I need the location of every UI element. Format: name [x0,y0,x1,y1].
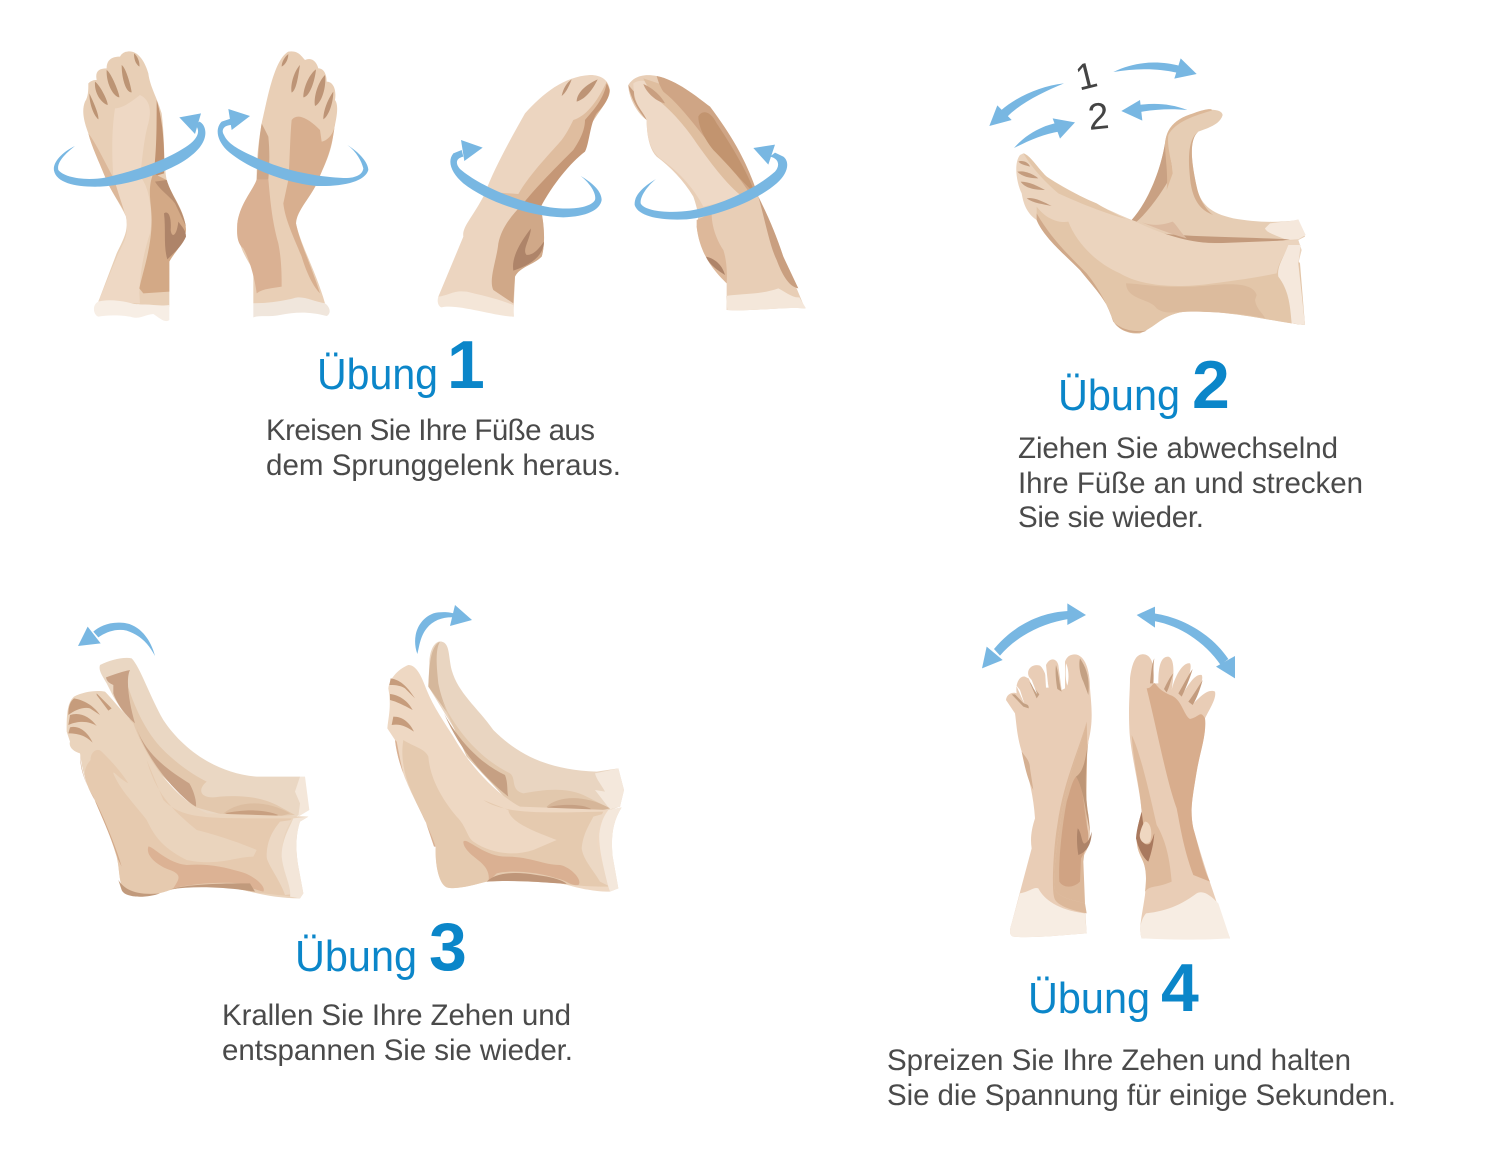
illustration: feet seen from front with circling arrows [54,51,368,321]
arrow: circling right side [635,145,787,220]
heading: Übung 3: Übung [295,932,417,981]
icon: right foot [237,51,337,317]
illustration: feet seen from side with circling arrows [438,75,806,317]
heading: Übung 1 [317,327,485,403]
icon: front foot with curled toes [67,691,308,898]
text block: exercise 2 instructions [1018,432,1363,534]
arrow: circling left side [450,140,602,217]
heading: Übung 1: 1 [447,327,485,403]
icon: right side foot [628,75,806,310]
panel: exercise 4 [887,603,1396,1112]
icon: right foot [1129,654,1230,940]
icon: front foot stretched [1016,153,1305,334]
arrow: right arrow 1 [1113,58,1197,79]
arrow: circling right [218,109,368,186]
text block: exercise 2 instructions: Ziehen Sie abwechselnd [1018,432,1338,465]
arrow: curved left [78,623,155,656]
text block: exercise 1 instructions: Kreisen Sie Ihre Füße aus [266,414,595,447]
icon: left foot [83,51,186,321]
illustration: feet flexing with arrows [989,54,1306,334]
text block: exercise 1 instructions [266,414,621,482]
text block: exercise 3 instructions: Krallen Sie Ihre Zehen und [222,999,571,1032]
text block: exercise 3 instructions: entspannen Sie sie wieder. [222,1034,573,1067]
text block: exercise 3 instructions [222,999,573,1067]
arrow: curved right [415,605,472,654]
icon: rear foot [428,641,624,817]
arrow: lower left arrow [1014,118,1075,148]
heading: Übung 2 [1058,347,1230,423]
arrow: upper left arrow [989,83,1064,126]
heading: Übung 2: Übung [1058,371,1180,420]
icon: left foot [1006,654,1092,937]
label: number 2: 2 [1086,94,1111,138]
text block: exercise 4 instructions: Sie die Spannung für einige Sekunden. [887,1079,1396,1112]
heading: Übung 4 [1028,950,1199,1026]
icon: front foot with relaxed toes [387,665,622,892]
illustration: feet with spread toes [982,603,1235,940]
heading: Übung 2: 2 [1192,347,1230,423]
panel: exercise 1 [54,51,806,482]
heading: Übung 1: Übung [317,350,438,399]
icon: rear foot pulled up [1132,109,1306,253]
panel: exercise 3 [67,605,624,1067]
icon: left side foot [438,75,610,317]
arrow: double-headed left [982,603,1086,668]
arrow: double-headed right [1137,607,1235,678]
text block: exercise 1 instructions: dem Sprunggelenk heraus. [266,449,621,482]
text block: exercise 2 instructions: Sie sie wieder. [1018,501,1204,534]
heading: Übung 4: 4 [1161,950,1199,1026]
text block: exercise 2 instructions: Ihre Füße an und strecken [1018,467,1363,500]
icon: rear foot [100,658,309,820]
panel: exercise 2 [989,54,1363,534]
illustration: toes relaxed [387,605,624,892]
heading: Übung 3 [295,909,467,985]
text block: exercise 4 instructions [887,1044,1396,1112]
heading: Übung 4: Übung [1028,974,1150,1023]
label: number 1: 1 [1071,54,1101,98]
illustration: toes curled [67,623,309,898]
arrow: left arrow 2 [1121,100,1187,121]
arrow: circling left [54,113,205,187]
text block: exercise 4 instructions: Spreizen Sie Ihre Zehen und halten [887,1044,1351,1077]
heading: Übung 3: 3 [429,909,467,985]
